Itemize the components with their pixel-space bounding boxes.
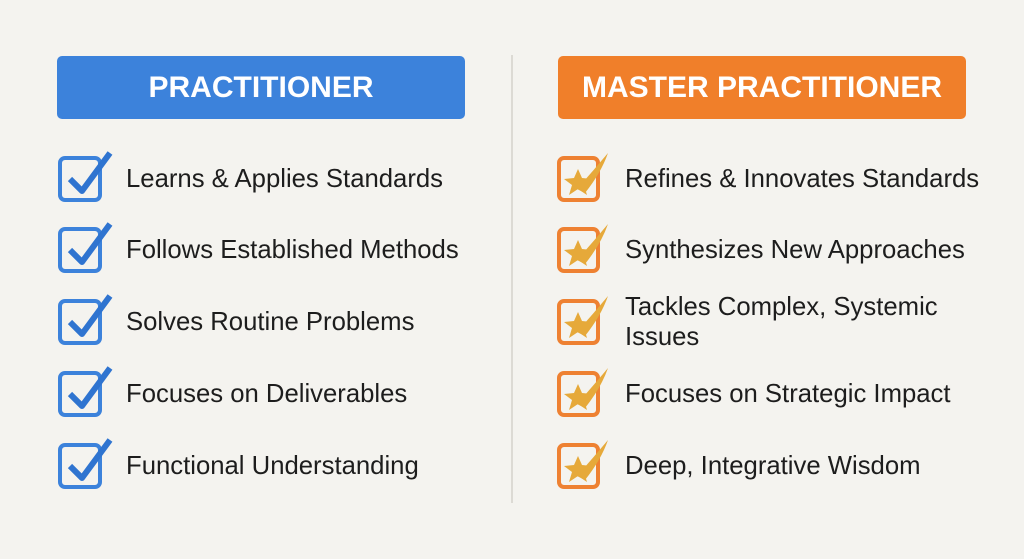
- item: solves: Solves Routine Problems: [126, 308, 414, 336]
- header: practitioner: PRACTITIONER: [148, 70, 374, 104]
- item: solves: [58, 294, 414, 345]
- item: functional: [58, 438, 419, 489]
- header: practitioner: [57, 56, 465, 119]
- item: synthesizes: [557, 224, 965, 273]
- item: tackles: Issues: [625, 323, 699, 351]
- item: refines: Refines & Innovates Standards: [625, 165, 979, 193]
- panel: practitioner list: [58, 151, 459, 489]
- item: tackles: [557, 293, 938, 351]
- item: wisdom: Deep, Integrative Wisdom: [625, 452, 921, 480]
- item: follows: [58, 222, 459, 273]
- header: master practitioner: [558, 56, 966, 119]
- header: master practitioner: MASTER PRACTITIONER: [582, 70, 942, 104]
- item: wisdom: [557, 440, 921, 489]
- item: synthesizes: Synthesizes New Approaches: [625, 236, 965, 264]
- item: learns: [58, 151, 443, 202]
- item: strategic: Focuses on Strategic Impact: [625, 380, 951, 408]
- item: strategic: [557, 368, 951, 417]
- item: tackles: Tackles Complex, Systemic: [625, 293, 938, 321]
- item: focuses: [58, 366, 407, 417]
- item: focuses: Focuses on Deliverables: [126, 380, 407, 408]
- item: functional: Functional Understanding: [126, 452, 419, 480]
- item: follows: Follows Established Methods: [126, 236, 459, 264]
- item: refines: [557, 153, 979, 202]
- divider: [511, 55, 513, 503]
- item: learns: Learns & Applies Standards: [126, 165, 443, 193]
- panel: master list: [557, 153, 979, 489]
